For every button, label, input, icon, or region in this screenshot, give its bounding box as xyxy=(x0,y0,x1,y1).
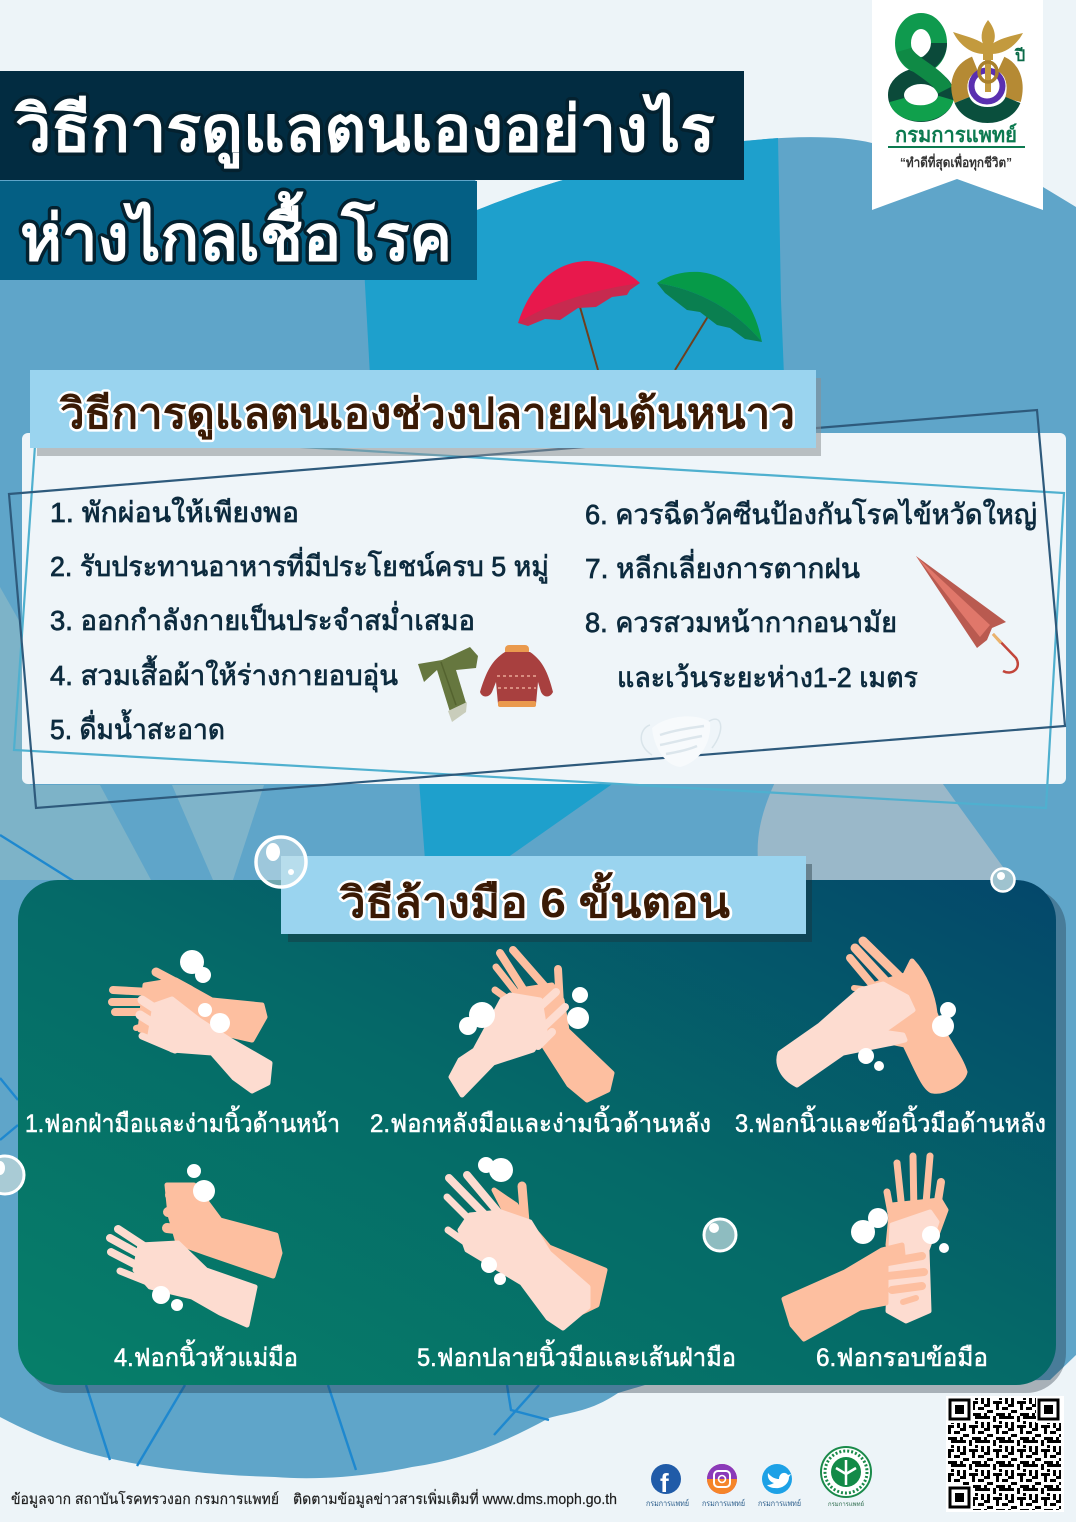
step 2: label: 2.ฟอกหลังมือและง่ามนิ้วด้านหลัง xyxy=(370,1105,711,1138)
step 2: hands xyxy=(451,950,612,1100)
QR finder top left xyxy=(947,1397,973,1423)
instagram caption: กรมการแพทย์ xyxy=(702,1498,745,1508)
step 3: hands xyxy=(779,941,965,1091)
list: items one to five: 4. สวมเสื้อผ้าให้ร่างกายอบอุ่น xyxy=(50,655,398,693)
step 6: hands xyxy=(784,1156,949,1339)
background: network lines xyxy=(0,835,549,1470)
heading bar: self-care in late rainy season xyxy=(30,370,821,456)
panel: hand washing steps xyxy=(18,880,1066,1393)
list: items one to five xyxy=(50,496,549,745)
panel: self-care list xyxy=(9,410,1066,808)
footer source text xyxy=(11,1489,617,1508)
list: items one to five: 2. รับประทานอาหารที่มีประโยชน์ครบ 5 หมู่ xyxy=(50,547,549,584)
seal caption: กรมการแพทย์ xyxy=(828,1500,864,1508)
icon: closed umbrella xyxy=(916,556,1018,673)
logo purple ring xyxy=(972,70,1002,102)
step 4: label: 4.ฟอกนิ้วหัวแม่มือ xyxy=(114,1339,298,1372)
heading text: วิธีล้างมือ 6 ขั้นตอน xyxy=(338,871,730,926)
frame: light blue xyxy=(14,431,1064,808)
step 6: label: 6.ฟอกรอบข้อมือ xyxy=(816,1344,988,1372)
logo numeral 0 xyxy=(959,64,1015,115)
icon: red sweater xyxy=(480,645,553,707)
icon: facebook: f xyxy=(660,1468,669,1498)
footer source text: ติดตามข้อมูลข่าวสารเพิ่มเติมที่ www.dms.moph.go.th xyxy=(293,1489,617,1508)
icon: soap bubble left edge xyxy=(0,1156,24,1194)
list: items six to eight: 8. ควรสวมหน้ากากอนามัย xyxy=(585,607,897,638)
logo slogan: “ทำดีที่สุดเพื่อทุกชีวิต” xyxy=(900,153,1012,171)
step 4: hands xyxy=(110,1164,280,1325)
title text line 2: ห่างไกลเชื้อโรค xyxy=(20,191,452,274)
icon: facebook xyxy=(646,1464,689,1508)
icon: instagram xyxy=(702,1464,745,1508)
heading text: วิธีการดูแลตนเองช่วงปลายฝนต้นหนาว xyxy=(59,390,795,440)
twitter caption: กรมการแพทย์ xyxy=(758,1498,801,1508)
background: bright blue wedge under list xyxy=(419,780,618,860)
list: items one to five: 5. ดื่มน้ำสะอาด xyxy=(50,709,225,745)
icon: soap bubble inside panel xyxy=(704,1219,736,1251)
list: items six to eight: 7. หลีกเลี่ยงการตากฝน xyxy=(585,549,860,584)
list: items six to eight: และเว้นระยะห่าง1-2 เมตร xyxy=(617,662,918,693)
logo numeral 8 xyxy=(896,21,946,114)
step 1: hands xyxy=(112,950,270,1091)
background: light wedge left of panel xyxy=(0,587,151,880)
icon: ministry seal xyxy=(821,1447,871,1508)
frame: dark blue xyxy=(9,410,1065,808)
step 5: label: 5.ฟอกปลายนิ้วมือและเส้นฝ่ามือ xyxy=(417,1339,736,1372)
footer source text: ข้อมูลจาก สถาบันโรคทรวงอก กรมการแพทย์ xyxy=(11,1490,279,1508)
list: items one to five: 3. ออกกำลังกายเป็นประจำสม่ำเสมอ xyxy=(50,601,475,636)
background: grey shape xyxy=(758,780,1016,885)
QR finder bottom left xyxy=(947,1485,973,1511)
title text line 1: วิธีการดูแลตนเองอย่างไร xyxy=(14,92,715,169)
list: items one to five: 1. พักผ่อนให้เพียงพอ xyxy=(50,496,299,528)
icon: soap bubble large xyxy=(256,837,306,887)
background: bright blue shape xyxy=(362,138,784,376)
list: items six to eight xyxy=(585,498,1037,693)
logo ribbon: 80 years department of medical services xyxy=(872,0,1043,210)
step 5: hands xyxy=(447,1157,605,1328)
step 3: label: 3.ฟอกนิ้วและข้อนิ้วมือด้านหลัง xyxy=(735,1105,1046,1138)
facebook caption: กรมการแพทย์ xyxy=(646,1498,689,1508)
QR finder top right xyxy=(1036,1397,1062,1423)
logo department name: กรมการแพทย์ xyxy=(895,123,1017,147)
logo text ปี: ปี xyxy=(1014,46,1025,65)
step 1: label: 1.ฟอกฝ่ามือและง่ามนิ้วด้านหน้า xyxy=(25,1105,340,1138)
icon: green umbrella xyxy=(657,272,762,370)
background: pale band xyxy=(172,785,264,880)
QR code xyxy=(946,1396,1064,1512)
logo torch and wings xyxy=(953,20,1023,92)
list: items six to eight: 6. ควรฉีดวัคซีนป้องกันโรคไข้หวัดใหญ่ xyxy=(585,498,1037,530)
title bar line 1 xyxy=(0,71,744,180)
icon: scarf xyxy=(418,647,478,722)
icon: face mask xyxy=(641,716,721,767)
icon: soap bubble top right xyxy=(992,868,1014,892)
heading bar: six hand washing steps xyxy=(281,856,812,942)
icon: twitter xyxy=(758,1464,801,1508)
icon: red umbrella xyxy=(518,261,640,370)
title bar line 2 xyxy=(0,181,477,280)
